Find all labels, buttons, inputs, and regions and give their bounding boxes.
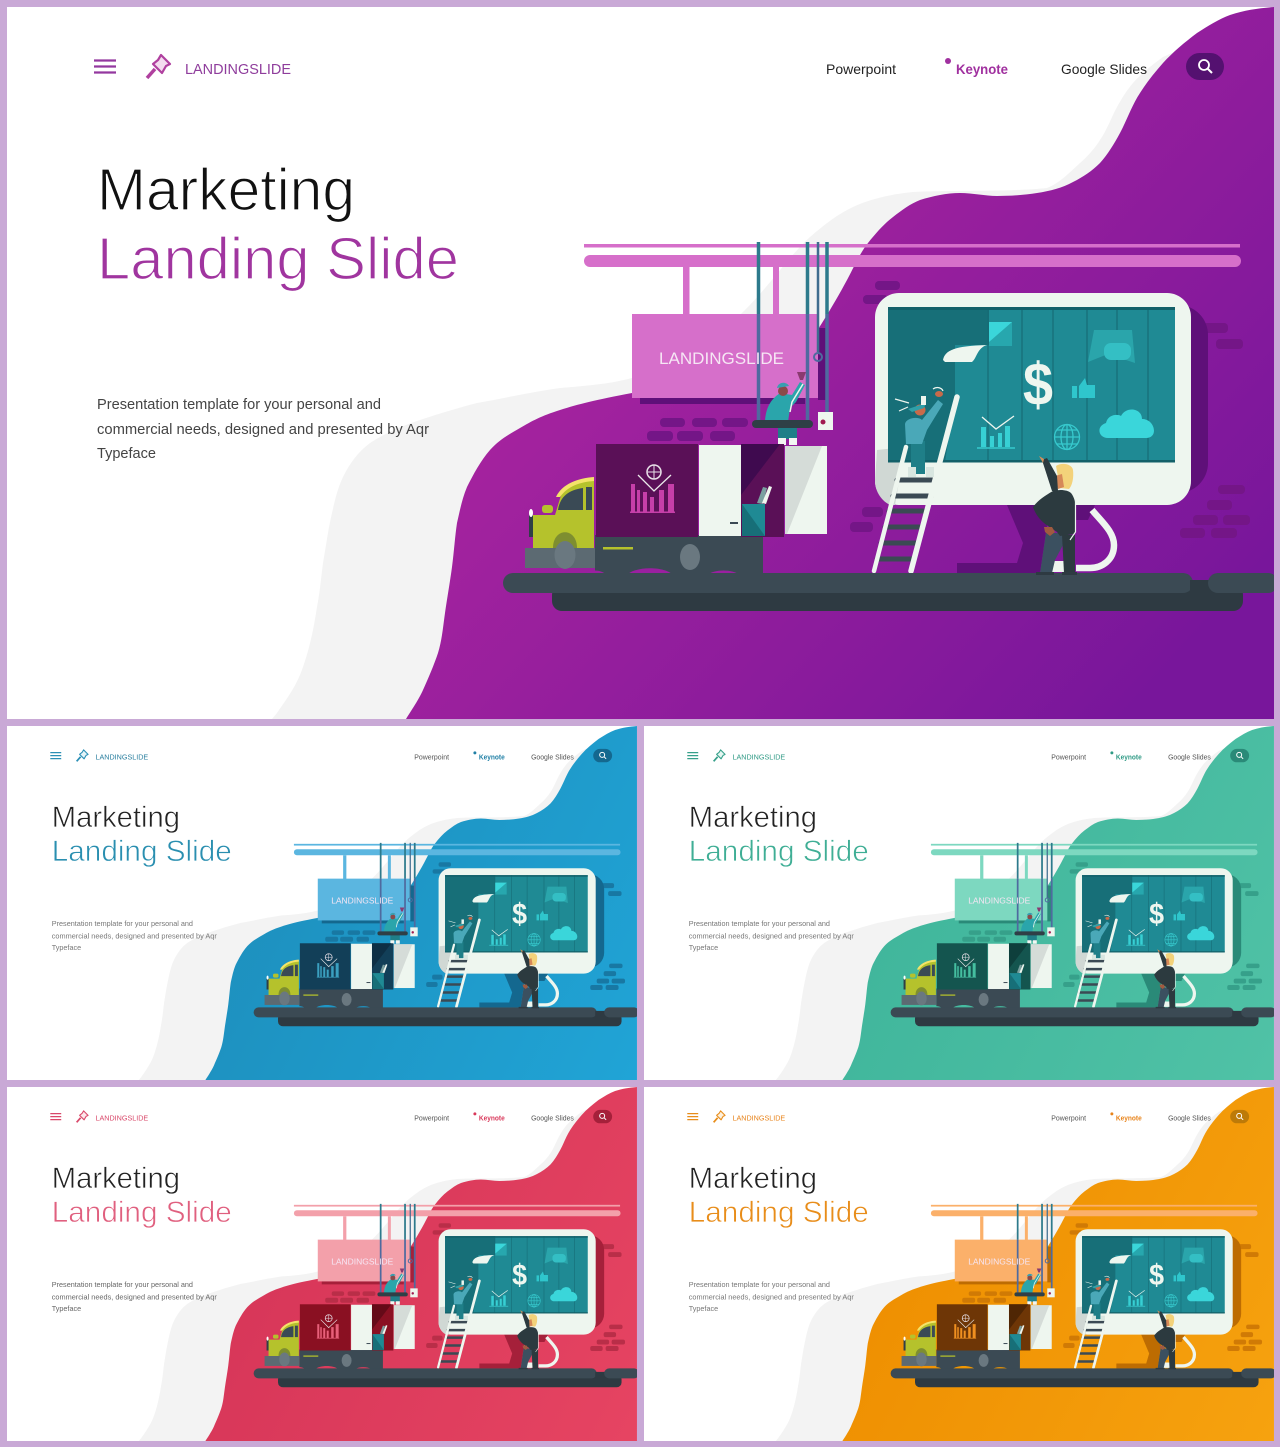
menu items: Powerpoint	[1051, 754, 1086, 761]
illustration: signage, truck, monitor and workers	[503, 242, 1278, 611]
panel: blue slide	[7, 726, 637, 1080]
panel: purple main slide	[7, 7, 1274, 719]
menu items	[414, 751, 574, 761]
menu items: Keynote	[1116, 1115, 1142, 1122]
menu items: Google Slides	[1168, 1115, 1211, 1122]
icon: hamburger menu	[687, 1114, 698, 1120]
icon: push pin	[147, 55, 170, 78]
brand name: LANDINGSLIDE	[96, 752, 148, 761]
navigation bar	[50, 1110, 612, 1123]
icon: paper curl	[943, 345, 987, 362]
heading	[689, 801, 869, 868]
menu items: Powerpoint	[414, 754, 449, 761]
description text	[689, 1280, 854, 1313]
icon: search pill	[593, 1110, 612, 1123]
icon: search pill	[1230, 749, 1249, 762]
description text: commercial needs, designed and presented by Aqr	[52, 931, 217, 940]
description text: Typeface	[97, 446, 156, 462]
floor platform	[503, 573, 1278, 611]
brand name: LANDINGSLIDE	[733, 752, 785, 761]
description text: Presentation template for your personal and	[52, 919, 193, 928]
overhead rails	[584, 244, 1241, 315]
description text	[52, 1280, 217, 1313]
icon: push pin	[77, 750, 88, 761]
purple wave	[406, 7, 1274, 719]
description text	[97, 397, 429, 462]
worker on platform	[752, 372, 813, 445]
menu items: Keynote	[479, 754, 505, 761]
heading	[97, 157, 459, 292]
icon: cloud	[1099, 410, 1154, 438]
navigation bar	[94, 53, 1224, 80]
monitor stand and cable	[957, 505, 1114, 573]
icon: hamburger menu	[50, 753, 61, 759]
heading	[689, 1162, 869, 1229]
worker on ladder	[895, 388, 943, 477]
menu items: Powerpoint	[1051, 1115, 1086, 1122]
description text: Typeface	[689, 943, 718, 952]
heading: Landing Slide	[97, 226, 459, 292]
icon: hamburger menu	[94, 60, 116, 72]
panel: red slide	[7, 1087, 637, 1441]
navigation bar	[687, 749, 1249, 762]
hanging sign board	[632, 314, 826, 404]
heading: Landing Slide	[52, 835, 232, 868]
icon: search pill	[593, 749, 612, 762]
icon: search pill	[1186, 53, 1224, 80]
icon: chat bubbles	[1088, 330, 1135, 363]
icon: push pin	[714, 1111, 725, 1122]
description text: commercial needs, designed and presented by Aqr	[689, 1292, 854, 1301]
panel: green slide	[644, 726, 1274, 1080]
description text: commercial needs, designed and presented by Aqr	[689, 931, 854, 940]
heading: Landing Slide	[52, 1196, 232, 1229]
description text: commercial needs, designed and presented by Aqr	[52, 1292, 217, 1301]
illustration	[891, 843, 1276, 1026]
navigation bar	[687, 1110, 1249, 1123]
rear panel behind truck	[785, 446, 827, 534]
illustration	[254, 1204, 639, 1387]
truck cargo box	[596, 444, 784, 537]
description text: Presentation template for your personal and	[52, 1280, 193, 1289]
menu items	[1051, 1112, 1211, 1122]
menu: Google Slides: Google Slides	[1061, 61, 1147, 77]
brand name: LANDINGSLIDE	[96, 1113, 148, 1122]
icon: push pin	[77, 1111, 88, 1122]
illustration	[254, 843, 639, 1026]
heading: Marketing	[689, 1162, 817, 1195]
heading: Marketing	[52, 1162, 180, 1195]
menu items: Keynote	[1116, 754, 1142, 761]
man pointing at screen	[1033, 456, 1077, 575]
orange wave	[842, 1087, 1274, 1441]
menu items	[1051, 751, 1211, 761]
brick wall patches	[647, 281, 1250, 538]
menu items: Keynote	[479, 1115, 505, 1122]
heading: Landing Slide	[689, 835, 869, 868]
ropes	[758, 242, 827, 420]
truck wheels	[554, 541, 700, 570]
description text	[52, 919, 217, 952]
heading: Marketing	[689, 801, 817, 834]
grey background wave	[139, 1087, 637, 1441]
menu items: Google Slides	[1168, 754, 1211, 761]
menu: Powerpoint: Powerpoint	[826, 61, 896, 77]
description text	[689, 919, 854, 952]
description text: Presentation template for your personal and	[689, 919, 830, 928]
description text: Typeface	[689, 1304, 718, 1313]
icon: push pin	[714, 750, 725, 761]
menu: Keynote active: Keynote	[956, 61, 1008, 77]
panel: orange slide	[644, 1087, 1274, 1441]
heading	[52, 1162, 232, 1229]
truck chassis	[525, 535, 763, 575]
green wave	[842, 726, 1274, 1080]
supplies bin	[742, 486, 772, 536]
paint bucket	[818, 412, 833, 430]
grey background wave	[776, 726, 1274, 1080]
heading	[52, 801, 232, 868]
red wave	[205, 1087, 637, 1441]
heading: Marketing	[97, 157, 355, 223]
icon: bar chart	[977, 416, 1015, 448]
description text: Presentation template for your personal and	[97, 397, 381, 413]
icon: hamburger menu	[50, 1114, 61, 1120]
description text: Presentation template for your personal and	[689, 1280, 830, 1289]
menu items: Google Slides	[531, 754, 574, 761]
menu items: Powerpoint	[414, 1115, 449, 1122]
blue wave	[205, 726, 637, 1080]
grey background wave	[272, 7, 1274, 719]
icon: thumbs up	[1072, 378, 1095, 398]
icon: globe	[1054, 424, 1080, 450]
monitor	[875, 293, 1208, 505]
icon: folded corner	[989, 322, 1012, 346]
menu items	[414, 1112, 574, 1122]
icon: search pill	[1230, 1110, 1249, 1123]
truck cab	[529, 477, 594, 548]
icon: hamburger menu	[687, 753, 698, 759]
ladder	[874, 397, 957, 571]
brand name: LANDINGSLIDE	[185, 61, 291, 78]
menu items: Google Slides	[531, 1115, 574, 1122]
brand name: LANDINGSLIDE	[733, 1113, 785, 1122]
description text: Typeface	[52, 943, 81, 952]
menu: Keynote active	[945, 58, 1008, 77]
icon: dollar sign: $	[1023, 351, 1053, 418]
heading: Marketing	[52, 801, 180, 834]
truck logo chart	[630, 465, 675, 513]
illustration	[891, 1204, 1276, 1387]
sign lettering: LANDINGSLIDE	[659, 349, 784, 368]
screen icons	[943, 322, 1154, 450]
grey background wave	[139, 726, 637, 1080]
navigation bar	[50, 749, 612, 762]
heading: Landing Slide	[689, 1196, 869, 1229]
description text: Typeface	[52, 1304, 81, 1313]
description text: commercial needs, designed and presented by Aqr	[97, 422, 429, 438]
grey background wave	[776, 1087, 1274, 1441]
